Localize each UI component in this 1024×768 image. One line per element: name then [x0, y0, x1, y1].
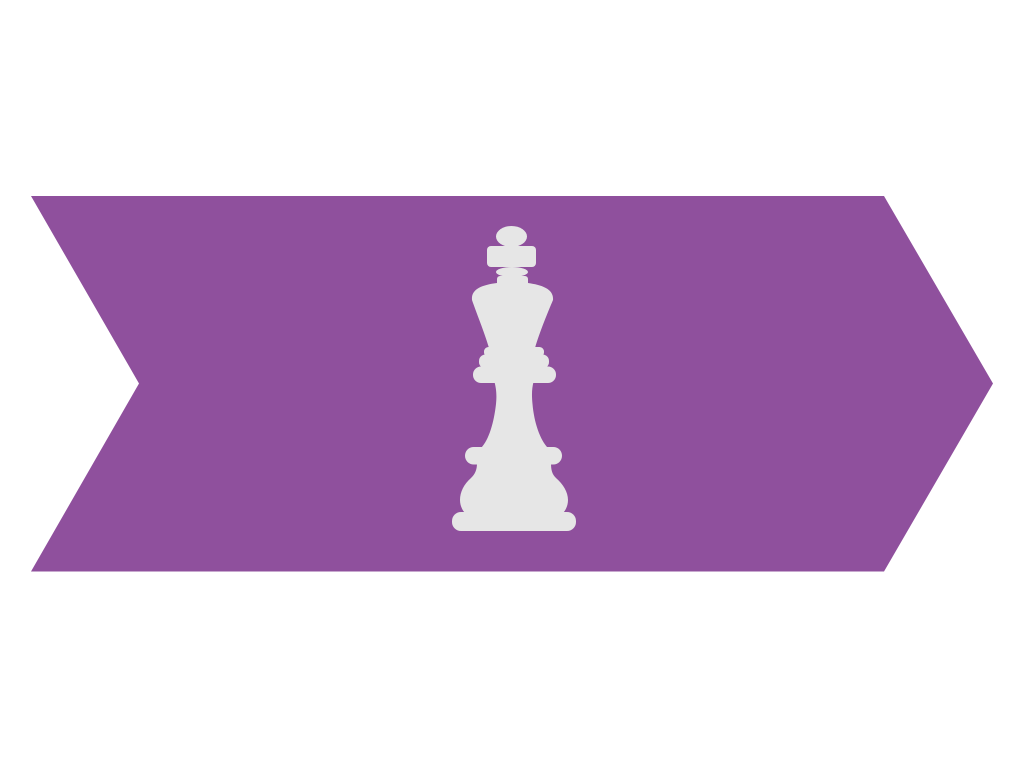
- king: upper collar: [497, 276, 528, 286]
- king: collar ring three: [473, 366, 556, 383]
- icon: chess king: [452, 226, 576, 531]
- king: base bulge: [460, 463, 568, 513]
- king: collar ring two: [479, 354, 549, 368]
- king: top ball: [496, 226, 527, 247]
- king: neck ring: [496, 267, 528, 277]
- king: stem: [481, 382, 548, 448]
- king: base collar: [465, 447, 562, 464]
- king: collar ring one: [484, 347, 544, 357]
- king: foot: [452, 512, 576, 531]
- chevron arrow banner: [31, 196, 993, 572]
- king: cross bar: [487, 246, 536, 267]
- king: crown body: [472, 283, 553, 348]
